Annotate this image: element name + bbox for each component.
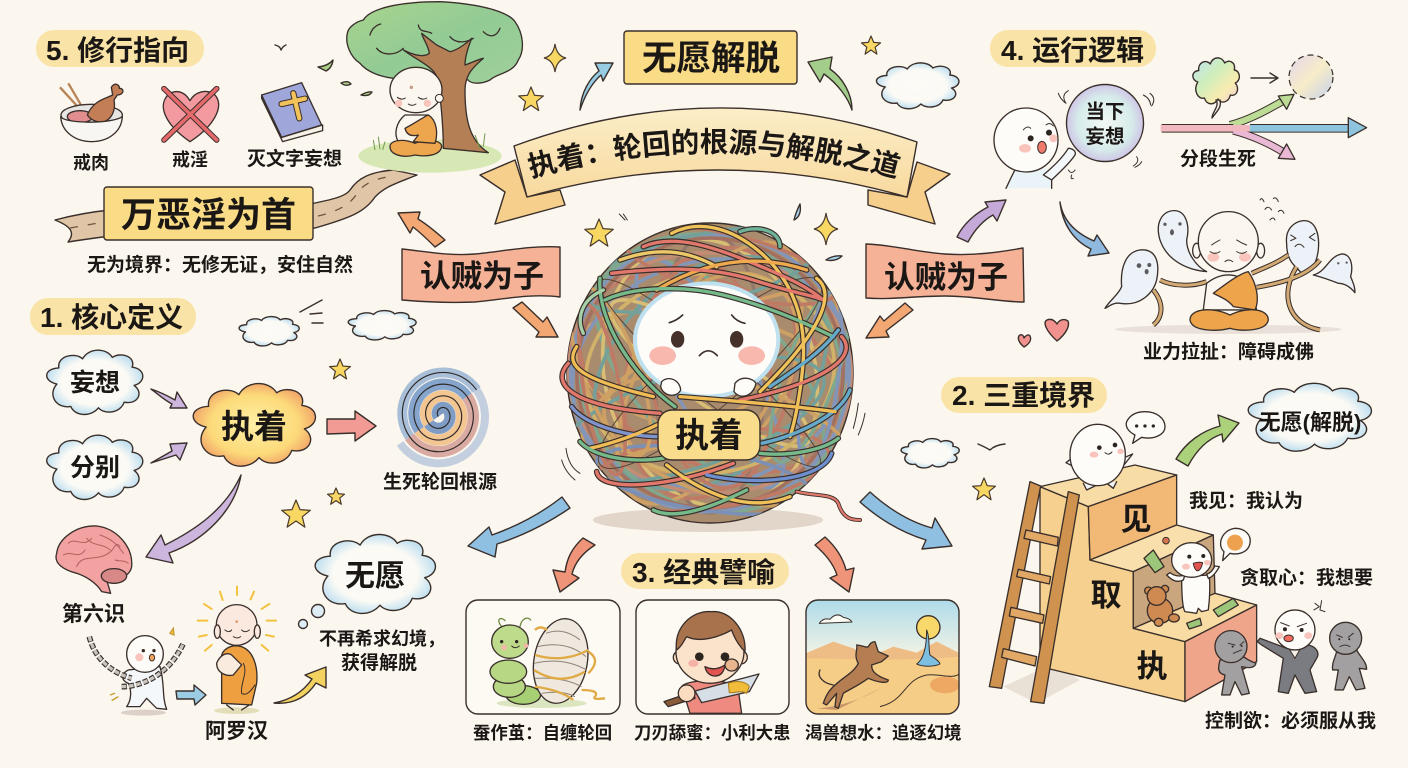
face	[635, 283, 778, 397]
bossy figure and gray followers	[1215, 601, 1367, 695]
figures on stairs	[1066, 412, 1367, 695]
title ribbon	[479, 107, 951, 225]
cloud: 执着	[193, 384, 315, 466]
illustration: monk pulled by ghosts	[1105, 198, 1355, 334]
arrow: blue right from ball	[860, 492, 952, 549]
leaves	[318, 60, 372, 96]
staircase	[989, 465, 1257, 703]
cloud: 分别	[47, 435, 143, 499]
heading: 3 经典譬喻: 3. 经典譬喻	[632, 557, 775, 588]
icon: bowl of meat	[60, 83, 123, 142]
arrow: coral left	[553, 538, 595, 592]
yarn base	[567, 223, 853, 523]
box: 万恶淫为首: 万恶淫为首	[121, 196, 296, 235]
heading: 5 修行指向: 5. 修行指向	[46, 35, 189, 66]
icon: rainbow cloud to fading bubble	[1193, 55, 1333, 118]
tag: 认贼为子 left	[402, 247, 560, 302]
text: 不再希求幻境: 不再希求幻境，	[319, 628, 445, 649]
label: 分段生死: 分段生死	[1180, 147, 1256, 170]
icon: crossed heart	[163, 89, 219, 142]
ribbon main	[514, 108, 917, 197]
arrow: blue left from ball	[468, 497, 570, 557]
top blob with speech bubble	[1066, 412, 1165, 490]
ball shadow	[593, 508, 823, 532]
arrow: orange to ball right	[866, 303, 913, 338]
arrow: orange to ball left	[513, 302, 558, 337]
cloud: 妄想: 妄想	[70, 369, 120, 397]
text: 无为境界: 无为境界：无修无证，安住自然	[87, 253, 353, 276]
cloud: 无愿(解脱): 无愿(解脱)	[1259, 410, 1361, 435]
stair labels	[1090, 502, 1168, 684]
bubble: 当下妄想	[1066, 84, 1144, 162]
title text: 执着：轮回的根源与解脱之道	[528, 128, 901, 180]
center label: 执着: 执着	[675, 417, 743, 455]
label: 刀刃舔蜜: 刀刃舔蜜：小利大患	[634, 723, 791, 743]
arrow: 分别 to 执着	[151, 443, 187, 463]
cloud: 无愿(解脱)	[1248, 383, 1371, 451]
illustration: meditating monk under tree	[55, 2, 522, 242]
cloud: 无愿: 无愿	[345, 560, 405, 593]
tag: 认贼为子 right	[866, 244, 1024, 302]
figure pushing bubble	[994, 91, 1154, 188]
label: 蚕作茧: 蚕作茧：自缠轮回	[473, 723, 612, 743]
text: 不再希求幻境	[319, 628, 445, 674]
text: 不再希求幻境: 获得解脱	[341, 652, 417, 674]
box: 无愿解脱	[624, 31, 797, 84]
panel: 2 three realms	[941, 377, 1376, 732]
label: 阿罗汉: 阿罗汉	[205, 720, 268, 743]
heading: 4 运行逻辑: 4. 运行逻辑	[1001, 35, 1144, 66]
arrow: coral right	[815, 537, 854, 592]
tag: 认贼为子 left: 认贼为子	[420, 259, 544, 294]
label: 戒淫: 戒淫	[172, 150, 208, 170]
arrow: long purple to brain	[146, 475, 241, 563]
center label: 执着	[658, 410, 760, 460]
card: silkworm	[466, 600, 620, 714]
central yarn ball	[559, 214, 866, 532]
arrow: green to wuyuan box	[808, 57, 852, 110]
icon: hearts	[1018, 319, 1069, 347]
arrow: green to cloud	[1176, 415, 1239, 466]
panel: 4 operating logic	[990, 30, 1367, 363]
label: 贪取心: 贪取心：我想要	[1240, 566, 1373, 589]
ribbon left tail	[480, 160, 565, 224]
thought bubbles	[298, 604, 324, 628]
arrow: blue to wuyuan box	[580, 63, 613, 110]
cloud: 妄想	[47, 350, 143, 414]
panel: 3 classic metaphors	[466, 553, 962, 743]
label: 渴兽想水: 渴兽想水：追逐幻境	[805, 723, 962, 743]
tag: 认贼为子 right: 认贼为子	[884, 260, 1008, 295]
bird	[275, 45, 286, 50]
label: 灭文字妄想: 灭文字妄想	[247, 147, 342, 170]
icon: arhat	[198, 587, 276, 714]
stair labels: 执	[1136, 649, 1168, 684]
arrow: blue down-right	[1060, 202, 1109, 256]
label: 我见: 我见：我认为	[1189, 490, 1303, 512]
decorative stars top	[282, 36, 995, 527]
icon: figure breaking chains	[89, 628, 183, 716]
thick outlined strands	[562, 214, 865, 520]
tree and monk	[347, 2, 522, 173]
box: 万恶淫为首	[104, 187, 313, 240]
icon: book with cross	[262, 83, 323, 142]
arrow: blue to arhat	[176, 685, 206, 705]
icon: samsara spiral	[377, 356, 503, 482]
arrow: purple up-right	[957, 200, 1006, 242]
bubble: 当下妄想: 当下	[1085, 101, 1125, 123]
label: 业力拉扯: 业力拉扯：障碍成佛	[1143, 340, 1314, 363]
arrow: 执着 to spiral	[327, 411, 376, 441]
icon: brain	[56, 526, 132, 593]
arrow: orange up-left	[398, 212, 445, 247]
card: thirsty animal in desert	[806, 600, 960, 717]
label: 控制欲: 控制欲：必须服从我	[1205, 709, 1376, 732]
arrows: branching paths	[1161, 94, 1367, 159]
decorative clouds	[239, 63, 1005, 468]
box: 无愿解脱: 无愿解脱	[642, 40, 780, 78]
thin yarn strands	[567, 225, 853, 516]
label: 第六识: 第六识	[62, 603, 125, 626]
cloud: 分别: 分别	[70, 454, 120, 482]
bubble: 当下妄想: 妄想	[1085, 125, 1125, 148]
cloud: 执着: 执着	[221, 408, 287, 445]
arrow: 妄想 to 执着	[151, 389, 187, 408]
ribbon right tail	[868, 162, 950, 224]
heading: 1 核心定义: 1. 核心定义	[40, 302, 183, 333]
stair labels: 取	[1090, 578, 1122, 613]
panel: 5 practice direction	[36, 30, 342, 173]
card: boy licking knife	[636, 600, 789, 714]
heading: 2 三重境界: 2. 三重境界	[952, 380, 1095, 411]
arrow: yellow to wuyuan	[274, 667, 326, 703]
stair labels: 见	[1120, 502, 1152, 537]
label: 戒肉: 戒肉	[73, 153, 109, 173]
label: 生死轮回根源: 生死轮回根源	[383, 471, 497, 493]
road	[55, 170, 417, 242]
cloud: 无愿	[315, 534, 435, 613]
grabbing figure with teddy and money	[1144, 528, 1250, 629]
panel: 1 core definition	[30, 298, 503, 743]
